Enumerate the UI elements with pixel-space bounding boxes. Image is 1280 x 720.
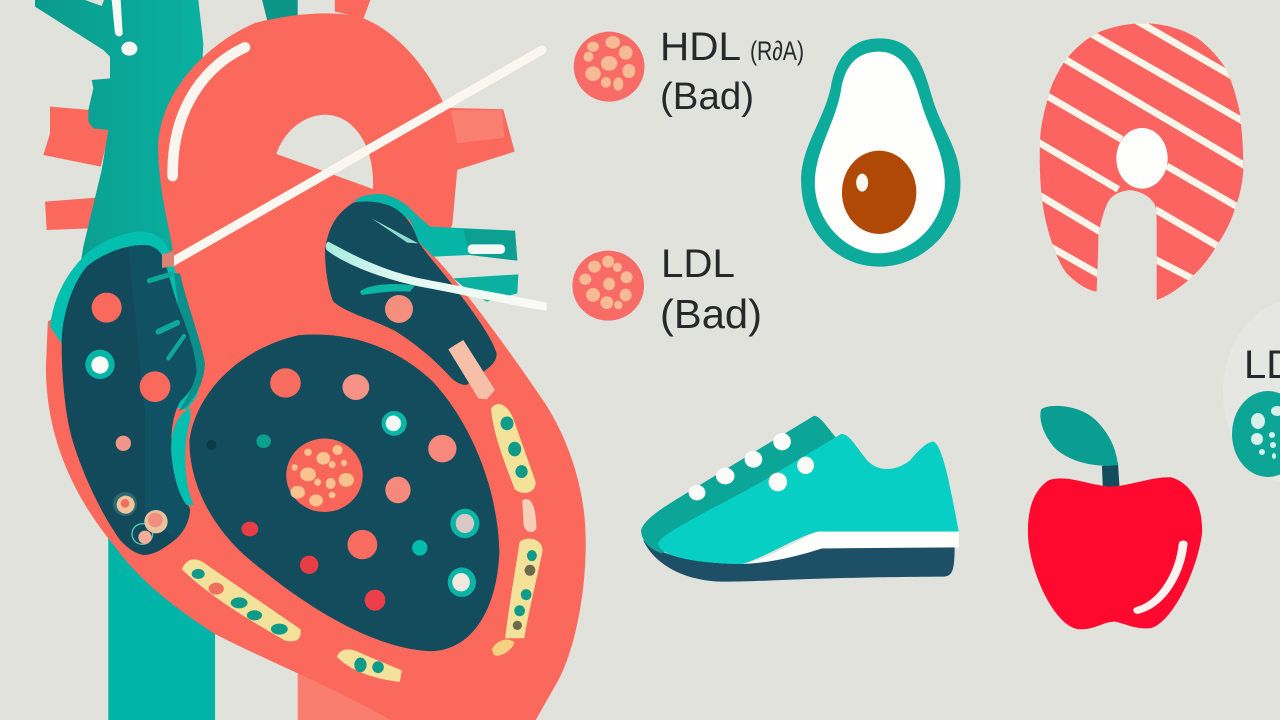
left chamber fill — [62, 245, 197, 555]
top vessel stub — [262, 0, 298, 30]
icon: HDL particle — [574, 32, 644, 102]
pointer line to LDL — [326, 242, 547, 311]
left chamber — [50, 232, 205, 555]
inner marks — [149, 274, 184, 358]
icon: avocado — [801, 38, 960, 267]
vein highlight bar — [112, 0, 123, 36]
left chamber outline — [50, 232, 205, 410]
particle — [385, 295, 413, 323]
label: HDL bad: (Bad) — [660, 76, 754, 118]
upper right chamber — [325, 194, 518, 399]
label: LDL: LDL — [661, 242, 735, 286]
aorta lighter patch — [451, 110, 504, 143]
vessel highlight — [173, 47, 245, 176]
thin spike — [372, 218, 418, 243]
teal arm upper shade — [463, 229, 517, 261]
icon: running shoe — [641, 416, 959, 582]
vein highlight dot — [121, 42, 137, 56]
legend: HDL — [574, 25, 804, 118]
aortic top — [335, 0, 370, 18]
icon: apple — [1028, 406, 1202, 629]
partial panel on right edge — [1223, 300, 1280, 484]
plaque pills — [182, 404, 543, 682]
heart body — [46, 13, 586, 720]
pink bar — [448, 340, 495, 399]
right teal border upper — [174, 273, 205, 412]
teal vein lower — [108, 528, 215, 720]
left chamber lighter strip — [128, 245, 197, 538]
veins and left vessels — [35, 0, 203, 267]
legend: LDL — [572, 242, 762, 337]
main chamber — [189, 335, 499, 651]
label: HDL garbled note: (R∂A) — [750, 36, 804, 66]
teal arm lower — [453, 274, 518, 302]
icon: salmon steak — [1037, 21, 1247, 300]
label: LDL bad: (Bad) — [660, 291, 762, 337]
aorta lower — [298, 661, 398, 720]
teal arm upper — [353, 194, 517, 261]
inner teal mark — [360, 284, 415, 295]
teal vein upper — [35, 0, 203, 267]
left red vessels — [43, 107, 110, 230]
pointer line tip — [162, 252, 174, 268]
icon: LDL particle — [572, 251, 644, 321]
particles in left chamber — [92, 293, 122, 323]
chamber fill — [325, 201, 497, 385]
LDL particle in chamber — [286, 439, 363, 512]
right teal border lower — [171, 408, 194, 505]
pointer line to HDL — [172, 50, 542, 262]
icon: teal particle — [1232, 391, 1280, 477]
label: HDL: HDL — [660, 25, 741, 69]
heart illustration — [35, 0, 586, 720]
heart body layers — [46, 0, 586, 720]
vessel highlight bar — [468, 244, 505, 254]
aortic arch opening — [276, 115, 373, 189]
pill contents — [192, 416, 537, 673]
